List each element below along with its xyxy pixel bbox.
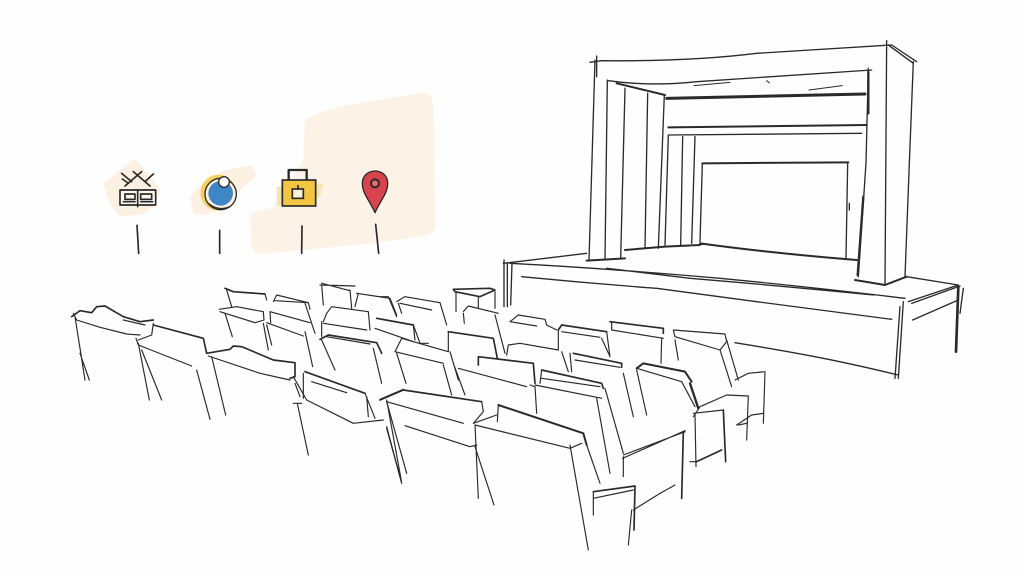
stage: [503, 41, 963, 378]
back row chairs: [219, 283, 415, 383]
front right rows: [458, 353, 748, 545]
icon row with wash backgrounds: [103, 93, 435, 254]
proscenium frame: [589, 41, 917, 285]
seating: left chairs and back rows: [72, 283, 415, 483]
cream wash: large background: [250, 93, 435, 254]
inner stage and back screen: [587, 125, 907, 285]
front left chairs: [72, 306, 403, 483]
small table: [453, 288, 495, 312]
middle rows: [380, 297, 765, 425]
icon: open book with rays: [103, 158, 161, 217]
icon: yellow bag: [277, 170, 323, 206]
front chairs: [380, 390, 600, 550]
stems under icons: [137, 224, 379, 253]
icon: blue circle: [190, 165, 257, 215]
icon: red map pin: [362, 171, 388, 213]
seating: centre and right chairs: [380, 288, 765, 550]
stage platform: [503, 253, 963, 378]
